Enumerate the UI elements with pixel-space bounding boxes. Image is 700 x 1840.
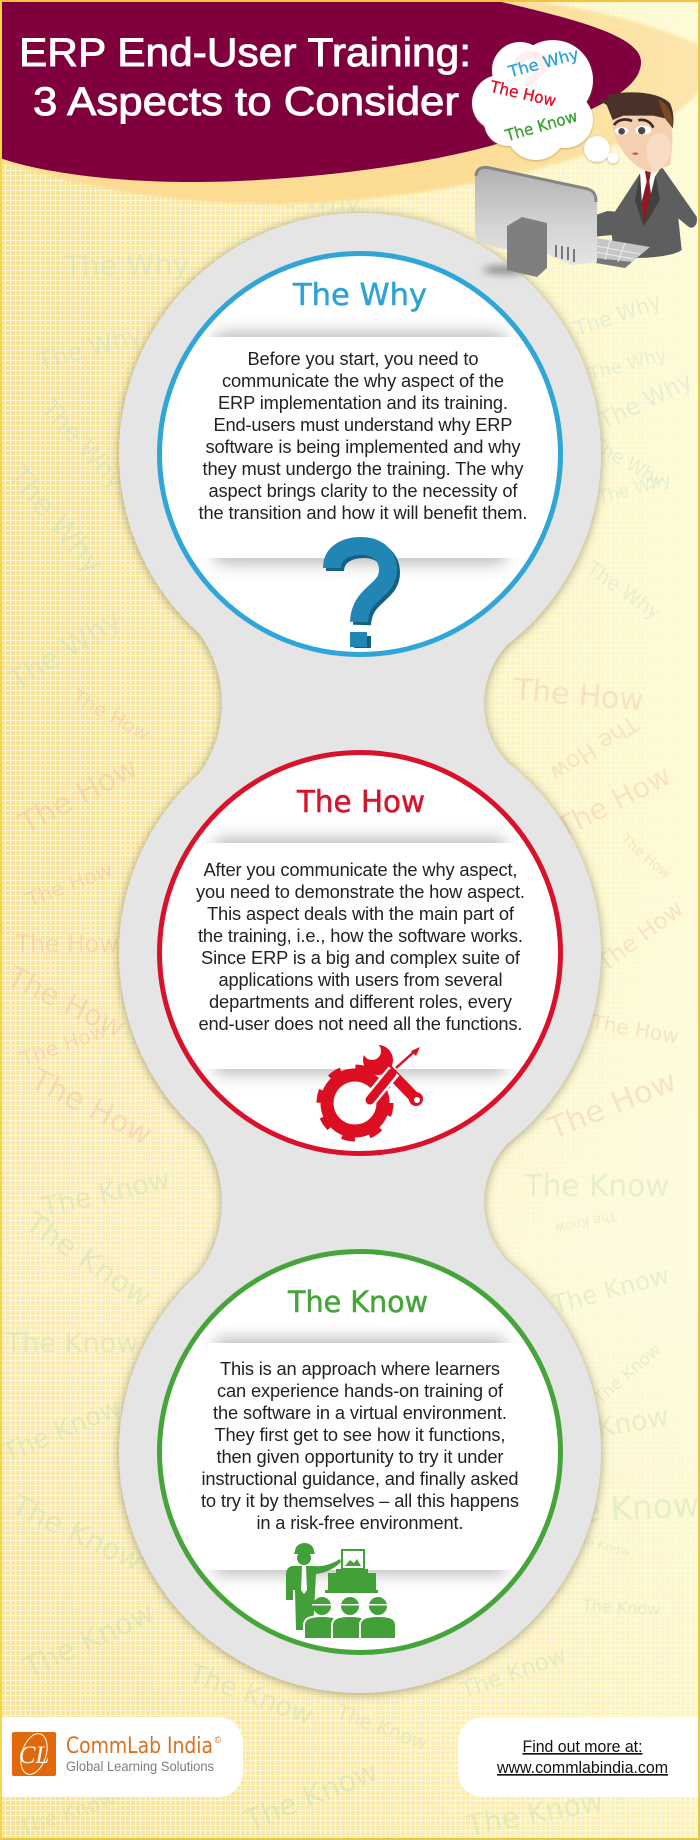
watermark words: The Why: The Why xyxy=(587,433,668,492)
thought bubble: ? xyxy=(510,37,552,115)
footer panel: logo xyxy=(0,1717,243,1797)
illustration: man at computer xyxy=(475,92,697,277)
watermark words: The How: The How xyxy=(24,1062,158,1153)
watermark words: The Why: The Why xyxy=(34,320,145,377)
watermark words: The Know: The Know xyxy=(16,1786,119,1840)
text block: the know: in a risk-free environment. xyxy=(256,1512,464,1533)
header swoosh xyxy=(0,0,700,204)
watermark words: The Know: The Know xyxy=(19,1205,158,1314)
heading: the why: The Why xyxy=(292,278,427,313)
watermark words: The Know: The Know xyxy=(537,1401,671,1454)
title: ERP End-User Training: xyxy=(19,31,471,75)
icon: gear and tools xyxy=(320,1042,423,1138)
watermark words: The Know: The Know xyxy=(38,1164,173,1224)
panel: the know xyxy=(155,1252,565,1652)
text block: the know: They first get to see how it functions, xyxy=(214,1424,506,1445)
watermark words: The Why: The Why xyxy=(63,248,190,283)
thought bubble: The Know xyxy=(502,106,580,145)
monitor rim xyxy=(476,167,596,202)
text block: the how: you need to demonstrate the how aspect. xyxy=(196,881,525,902)
monitor xyxy=(475,166,597,265)
icon: CommLab logo xyxy=(12,1730,56,1778)
text block: the why: ERP implementation and its training. xyxy=(218,392,508,413)
watermark words: The Know: The Know xyxy=(553,1207,619,1235)
watermark words: The How xyxy=(1,672,689,1153)
watermark words: The Why: The Why xyxy=(35,393,131,495)
text block: the why xyxy=(198,348,528,523)
watermark words: The Know: The Know xyxy=(184,1658,317,1732)
watermark words: The Why: The Why xyxy=(585,344,669,385)
watermark words: The Why: The Why xyxy=(594,366,697,436)
brand name: CommLab India xyxy=(66,1734,213,1759)
watermark words: The How: The How xyxy=(592,896,689,977)
heading: the how: The How xyxy=(296,785,425,820)
watermark words: The Why: The Why xyxy=(249,181,362,218)
text block: the know xyxy=(201,1358,519,1533)
watermark words: The How: The How xyxy=(545,709,644,786)
keyboard xyxy=(596,238,650,268)
watermark words: The Why xyxy=(0,181,697,698)
heading: the know: The Know xyxy=(287,1285,428,1319)
text block: the how: After you communicate the why aspect, xyxy=(204,859,518,880)
text block: the know: This is an approach where learners xyxy=(220,1358,500,1379)
watermark words: The How: The How xyxy=(68,685,153,746)
watermark words: The How: The How xyxy=(22,857,116,912)
thought bubble: The Why xyxy=(505,44,581,81)
shadow under stand xyxy=(483,266,527,274)
text block: the how: Since ERP is a big and complex suite of xyxy=(201,947,521,968)
watermark words: The Know: The Know xyxy=(548,1260,673,1320)
text block: the how: This aspect deals with the main part of xyxy=(207,903,515,924)
watermark words: The How: The How xyxy=(1,959,130,1045)
text block: the know: the software in a virtual environment. xyxy=(213,1402,507,1423)
text block: the how: the training, i.e., how the software works. xyxy=(198,925,523,946)
man xyxy=(596,92,697,258)
text block: the why: End-users must understand why ERP xyxy=(214,414,512,435)
watermark words: The How: The How xyxy=(550,759,676,845)
text block: the why: aspect brings clarity to the necessity of xyxy=(208,480,518,501)
watermark words: The Know: The Know xyxy=(0,1392,125,1469)
title xyxy=(19,31,471,124)
vents xyxy=(556,245,574,262)
text block: the know: then given opportunity to try it under xyxy=(216,1446,504,1467)
text block: the why: the transition and how it will benefit them. xyxy=(198,502,528,523)
watermark words: The Why: The Why xyxy=(2,603,127,698)
title: 3 Aspects to Consider xyxy=(33,80,459,124)
watermark words: The How: The How xyxy=(15,930,118,958)
text block: the why: communicate the why aspect of the xyxy=(222,370,504,391)
watermark words: The Know: The Know xyxy=(581,1596,661,1619)
watermark words: The Know: The Know xyxy=(589,1340,665,1409)
text block: the why: they must undergo the training. The why xyxy=(202,458,524,479)
text block: the how xyxy=(196,859,525,1034)
text block: the know: can experience hands-on training of xyxy=(217,1380,504,1401)
text block: the how: applications with users from several xyxy=(218,969,502,990)
find out more: Find out more at: xyxy=(522,1738,642,1756)
watermark words: The How: The How xyxy=(12,750,143,841)
panel: the why xyxy=(155,254,565,654)
watermark words: The How: The How xyxy=(512,672,645,719)
monitor stand xyxy=(507,217,547,277)
text block: the how: end-user does not need all the functions. xyxy=(198,1013,522,1034)
watermark words: The Know: The Know xyxy=(17,1595,159,1685)
watermark words: The How: The How xyxy=(617,831,674,882)
text block: the why: software is being implemented and why xyxy=(206,436,521,457)
header banner xyxy=(0,0,641,182)
footer panel: link xyxy=(458,1717,700,1797)
watermark words: The How: The How xyxy=(589,1009,681,1049)
watermark words: The Know: The Know xyxy=(4,1328,138,1359)
copyright mark: © xyxy=(215,1735,222,1745)
watermark words: The Know: The Know xyxy=(333,1700,431,1755)
tagline: Global Learning Solutions xyxy=(66,1758,214,1774)
icon: trainer and learners xyxy=(286,1543,396,1639)
thought bubble xyxy=(472,37,618,164)
watermark words: The Know: The Know xyxy=(537,1485,700,1532)
thought bubble: The How xyxy=(488,77,558,110)
panel: the how xyxy=(155,752,565,1154)
text block: the how: departments and different roles, every xyxy=(209,991,513,1012)
watermark words: The Know: The Know xyxy=(524,1169,670,1204)
watermark words: The Know: The Know xyxy=(239,1754,383,1838)
website: www.commlabindia.com xyxy=(496,1759,668,1777)
watermark words: The Know: The Know xyxy=(6,1488,148,1578)
icon: question mark xyxy=(332,546,391,648)
text block: the know: to try it by themselves – all this happens xyxy=(201,1490,519,1511)
watermark words: The Why: The Why xyxy=(595,469,674,509)
watermark words: The Know: The Know xyxy=(569,1530,632,1560)
watermark words: The Know: The Know xyxy=(457,1642,570,1705)
watermark words: The Why: The Why xyxy=(0,458,110,581)
watermark words: The Why: The Why xyxy=(570,289,664,342)
watermark words: The Know xyxy=(0,1164,700,1840)
icon: CommLab logo: CL xyxy=(19,1742,49,1769)
grey capsule backdrop xyxy=(119,213,601,1693)
text block: the why: Before you start, you need to xyxy=(248,348,478,369)
text block: the know: instructional guidance, and finally asked xyxy=(202,1468,518,1489)
watermark words: The How: The How xyxy=(16,1018,110,1071)
watermark words: The Why: The Why xyxy=(582,556,666,625)
watermark words: The How: The How xyxy=(542,1064,682,1147)
